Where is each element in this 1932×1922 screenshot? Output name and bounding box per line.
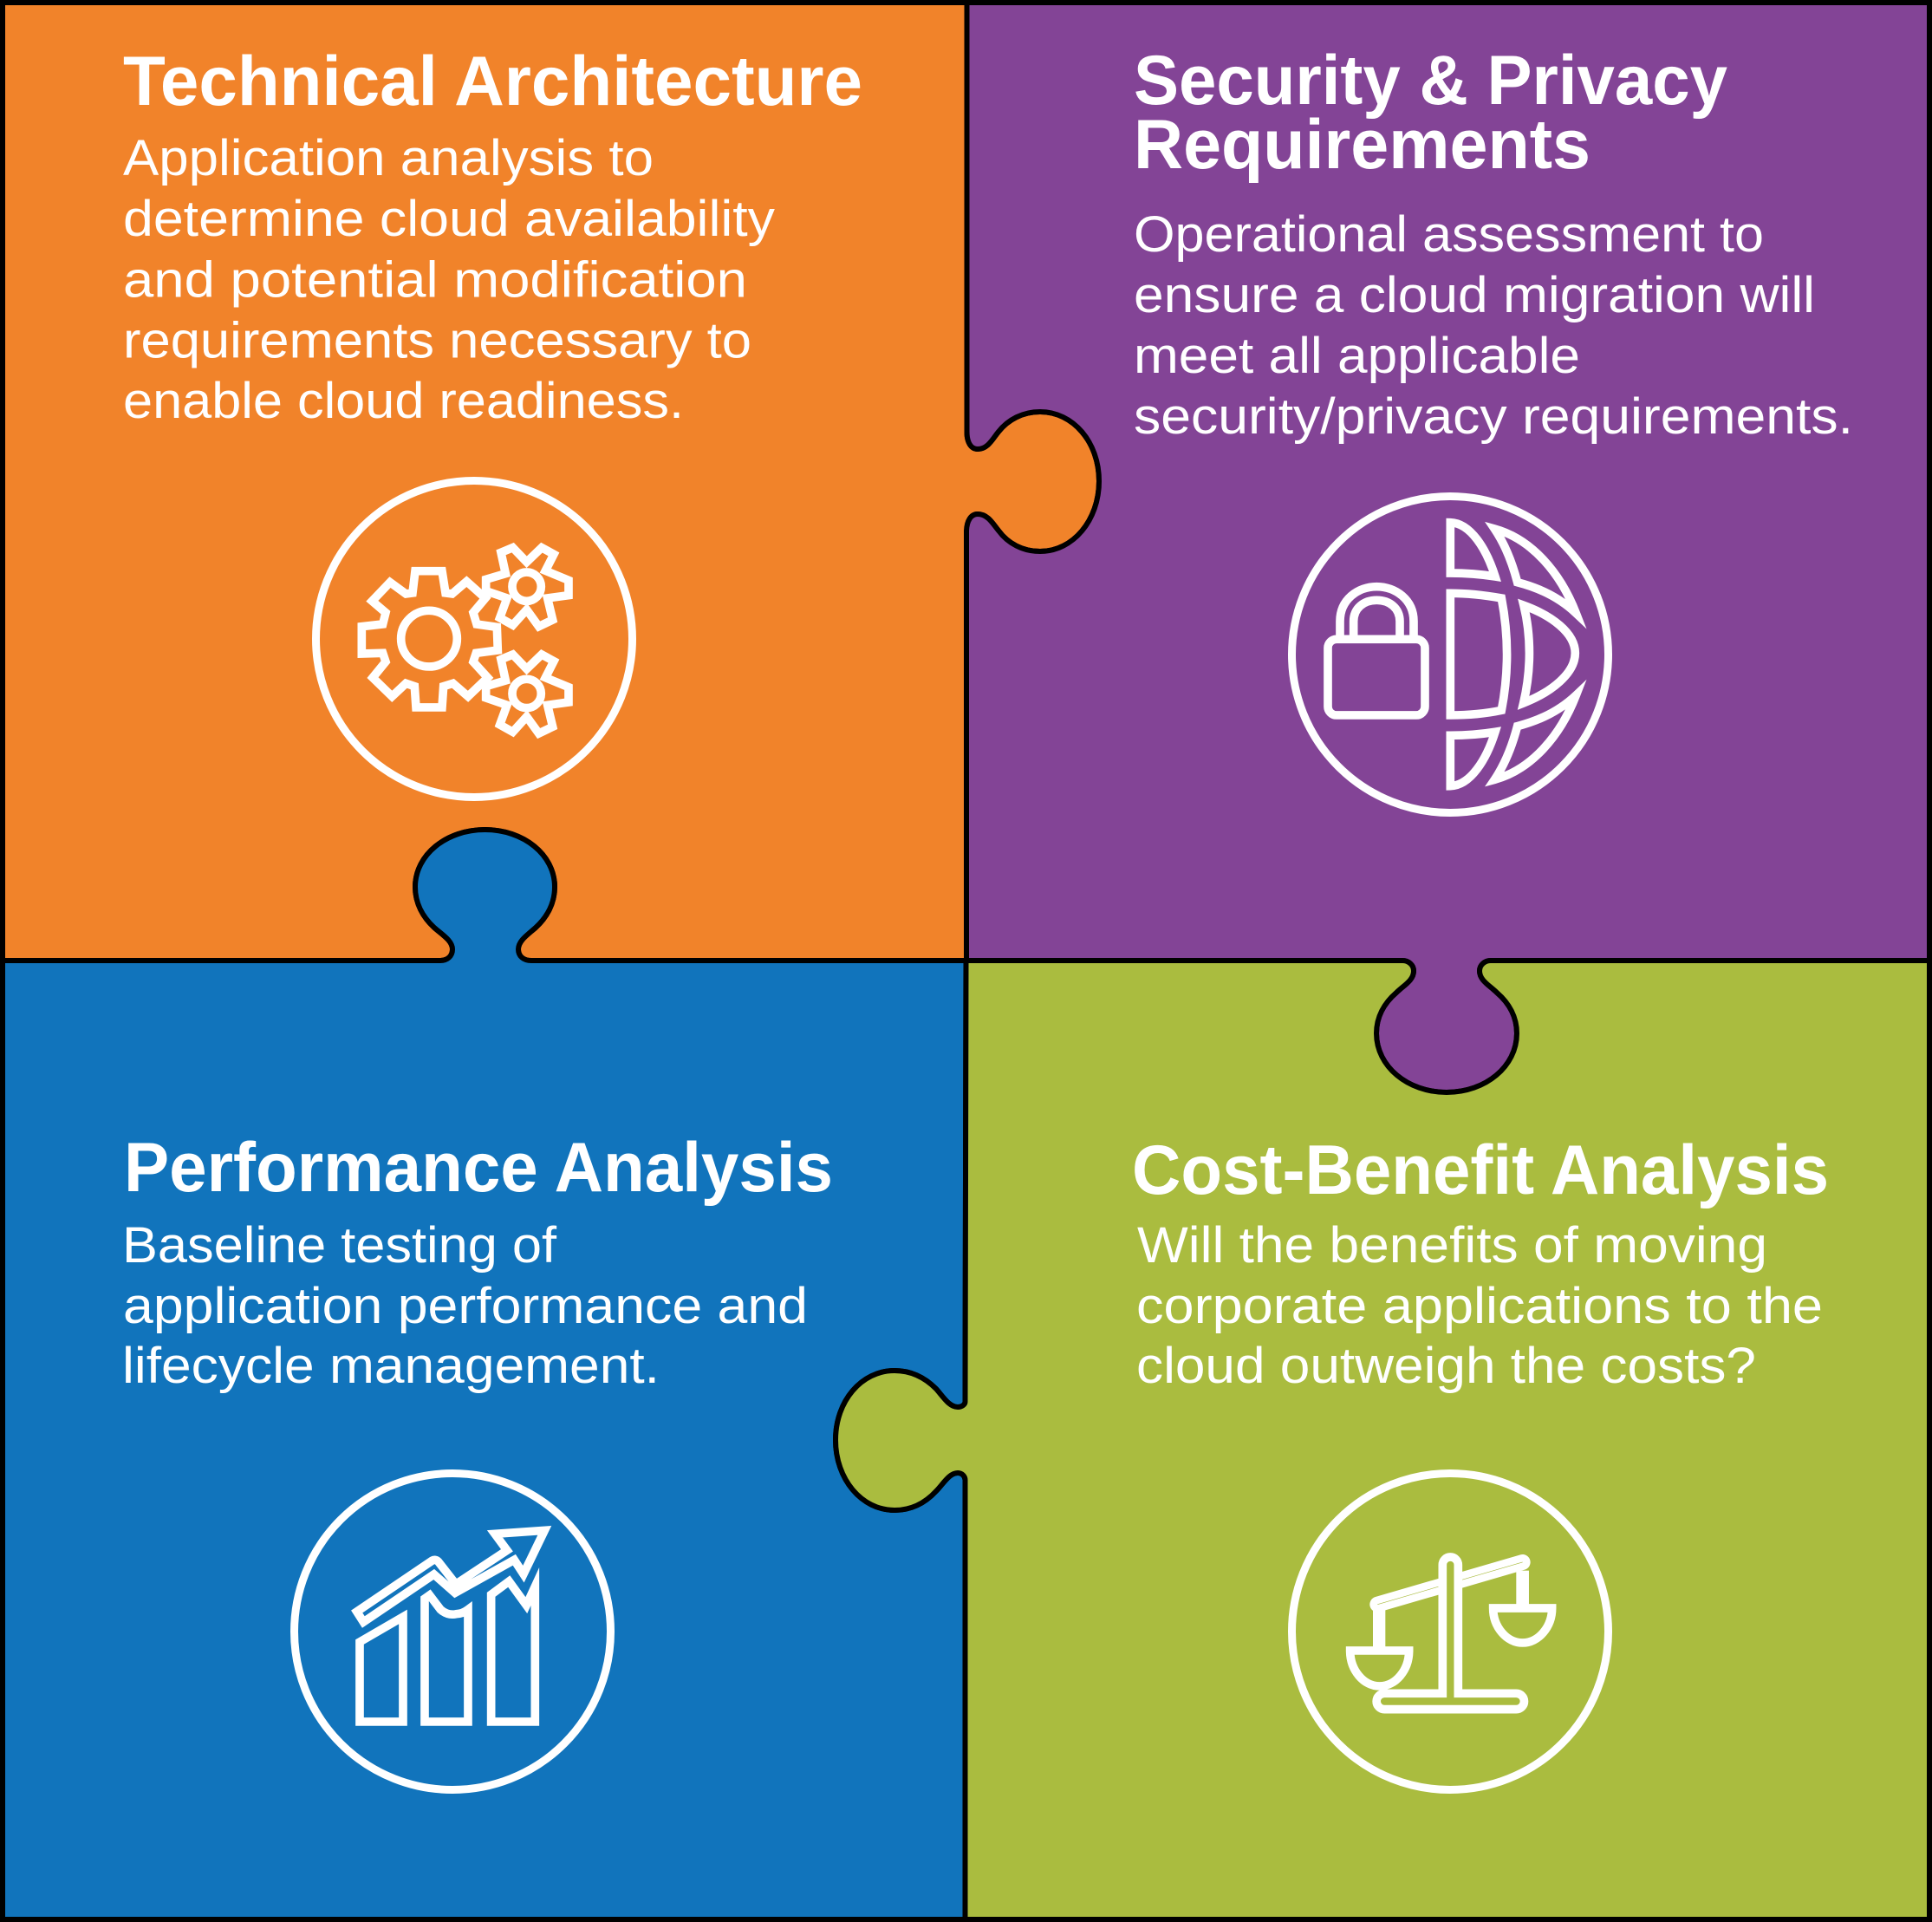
body text: Application analysis to: [123, 130, 654, 186]
body text: Operational assessment to: [1134, 206, 1764, 263]
body text: ensure a cloud migration will: [1134, 267, 1815, 323]
panel: Cost-Benefit Analysis: [836, 961, 1929, 1919]
green puzzle piece: [836, 961, 1929, 1919]
body text: security/privacy requirements.: [1134, 388, 1853, 445]
heading: [1134, 42, 1727, 184]
icon: balance scale: [1291, 1474, 1609, 1789]
body text: Baseline testing of: [122, 1217, 557, 1274]
body text: [123, 130, 775, 429]
blue puzzle piece: [3, 830, 966, 1919]
body text: corporate applications to the: [1136, 1278, 1823, 1334]
body text: application performance and: [123, 1278, 808, 1334]
body text: determine cloud availability: [123, 191, 775, 247]
heading: Security & Privacy: [1134, 42, 1727, 120]
panel: Performance Analysis: [3, 830, 966, 1919]
purple puzzle piece: [966, 3, 1929, 1092]
body text: meet all applicable: [1134, 328, 1580, 384]
heading: Cost-Benefit Analysis: [1132, 1131, 1829, 1209]
heading: Requirements: [1134, 106, 1590, 184]
body text: and potential modification: [123, 251, 747, 309]
heading: Technical Architecture: [123, 42, 862, 121]
panel: Security & Privacy Requirements: [966, 3, 1929, 1092]
icon: gears: [315, 480, 633, 798]
icon: rising bar chart: [295, 1474, 610, 1789]
body text: lifecycle management.: [122, 1338, 660, 1394]
body text: requirements necessary to: [123, 312, 751, 369]
body text: [1134, 206, 1853, 445]
orange puzzle piece: [3, 3, 1099, 961]
body text: [122, 1217, 808, 1394]
body text: [1136, 1217, 1823, 1394]
body text: cloud outweigh the costs?: [1136, 1338, 1756, 1394]
heading: Performance Analysis: [124, 1129, 833, 1207]
icon: lock and globe: [1291, 496, 1609, 813]
body text: Will the benefits of moving: [1137, 1217, 1767, 1274]
body text: enable cloud readiness.: [123, 373, 684, 429]
panel: Technical Architecture: [3, 3, 1099, 961]
